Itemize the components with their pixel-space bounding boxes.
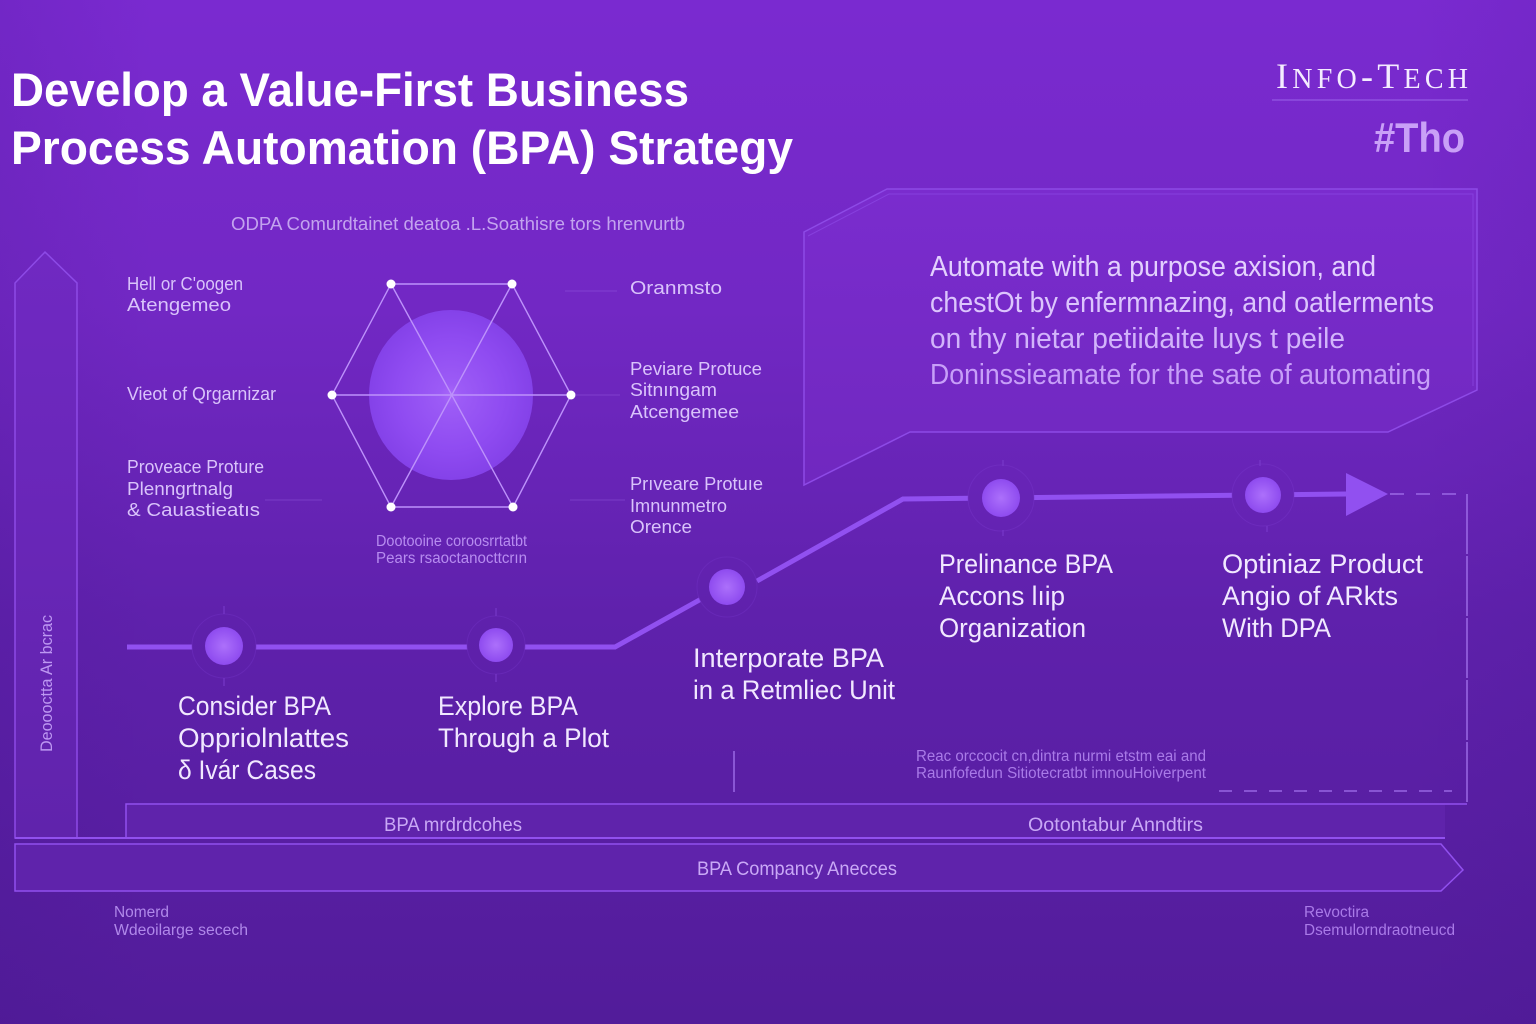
step 5 label: Optiniaz Product (1222, 549, 1423, 579)
footnote left: Wdeoilarge secech (114, 922, 248, 939)
milestone node 4 (968, 460, 1034, 536)
footnote right (1304, 904, 1455, 939)
center orb (369, 310, 533, 480)
step 1 label: Consider BPA (178, 691, 331, 721)
step 1 label (178, 691, 349, 785)
milestone node 5 (1232, 460, 1294, 532)
left hexagon labels: Proveace Proture (127, 456, 264, 477)
milestone node 2 (467, 608, 525, 682)
outcome note (916, 748, 1207, 782)
outcome note: Reac orccocit cn,dintra nurmi etstm eai and (916, 748, 1206, 765)
right hexagon labels: Imnunmetro (630, 495, 727, 516)
right hexagon labels: Atcengemee (630, 401, 739, 422)
callout text: Automate with a purpose axision, and (930, 251, 1376, 283)
right hexagon labels: Peviare Protuce (630, 358, 762, 379)
left hexagon labels: Hell or C'oogen (127, 273, 243, 294)
callout text: chestOt by enfermnazing, and oatlerments (930, 287, 1434, 319)
band: BPA milestones (15, 804, 1467, 838)
band: BPA milestones: BPA mrdrdcohes (384, 814, 522, 836)
step 1 label: Oppriolnlattes (178, 723, 349, 753)
step 2 label: Through a Plot (438, 723, 609, 753)
band: BPA milestones: Ootontabur Anndtirs (1028, 814, 1203, 836)
left hexagon labels (127, 273, 276, 520)
left hexagon labels: Plenngrtnalg (127, 478, 233, 499)
badge: #Tho: #Tho (1374, 114, 1465, 161)
title (11, 63, 793, 174)
arrowhead (1346, 473, 1388, 516)
callout text: on thy nietar petiidaite luys t peile (930, 323, 1345, 355)
timeline path (127, 473, 1388, 647)
milestone node 3 (697, 557, 757, 617)
step 4 label: Prelinance BPA (939, 549, 1113, 579)
left vertical arrow (15, 252, 77, 838)
band: BPA company arrow: BPA Compancy Anecces (697, 858, 897, 880)
milestone node 1 (192, 606, 256, 686)
hexagon outline and spokes (332, 284, 571, 507)
title: Process Automation (BPA) Strategy (11, 121, 793, 174)
right hexagon labels: Prıveare Protuıe (630, 473, 763, 494)
step 5 label: Angio of ARkts (1222, 581, 1398, 611)
step 3 label: in a Retmliec Unit (693, 675, 895, 705)
hexagon nodes (328, 280, 576, 512)
left hexagon labels: Atengemeo (127, 294, 231, 315)
footnote left: Nomerd (114, 904, 169, 921)
left hexagon labels: Vieot of Qrgarnizar (127, 383, 276, 404)
step 2 label: Explore BPA (438, 691, 578, 721)
band: BPA company arrow (15, 844, 1463, 891)
step 4 label: Organization (939, 613, 1086, 643)
right hexagon labels: Sitnıngam (630, 379, 717, 400)
hexagon caption (376, 533, 528, 567)
framework heading: ODPA Comurdtainet deatoa .L.Soathisre tors hrenvurtb (231, 213, 685, 234)
footnote right: Dsemulorndraotneucd (1304, 922, 1455, 939)
outcome note: Raunfofedun Sitiotecratbt imnouHoiverpent (916, 765, 1207, 782)
title: Develop a Value-First Business (11, 63, 689, 116)
dashed outcome frame (734, 494, 1467, 804)
hexagon caption: Pears rsaoctanocttcrın (376, 550, 527, 567)
left hexagon labels: & Cauastieatıs (127, 499, 260, 520)
right hexagon labels: Oranmsto (630, 277, 722, 298)
left vertical arrow: Deoooctta Ar bcrac (38, 615, 56, 752)
step 3 label (693, 643, 895, 705)
step 5 label (1222, 549, 1423, 643)
callout text: Doninssieamate for the sate of automating (930, 359, 1431, 391)
step 4 label: Accons lıip (939, 581, 1065, 611)
right hexagon labels (630, 277, 763, 537)
callout text (930, 251, 1434, 391)
footnote left (114, 904, 248, 939)
hexagon diagram (328, 280, 576, 512)
step 2 label (438, 691, 609, 753)
panel: callout statement (804, 189, 1477, 485)
hexagon caption: Dootooine coroosrrtatbt (376, 533, 528, 550)
step 5 label: With DPA (1222, 613, 1331, 643)
step 3 label: Interporate BPA (693, 643, 884, 673)
step 4 label (939, 549, 1113, 643)
right hexagon labels: Orence (630, 516, 692, 537)
step 1 label: δ Ivár Cases (178, 755, 316, 785)
footnote right: Revoctira (1304, 904, 1369, 921)
logo: Info-Tech: INFO-TECH (1276, 56, 1468, 96)
